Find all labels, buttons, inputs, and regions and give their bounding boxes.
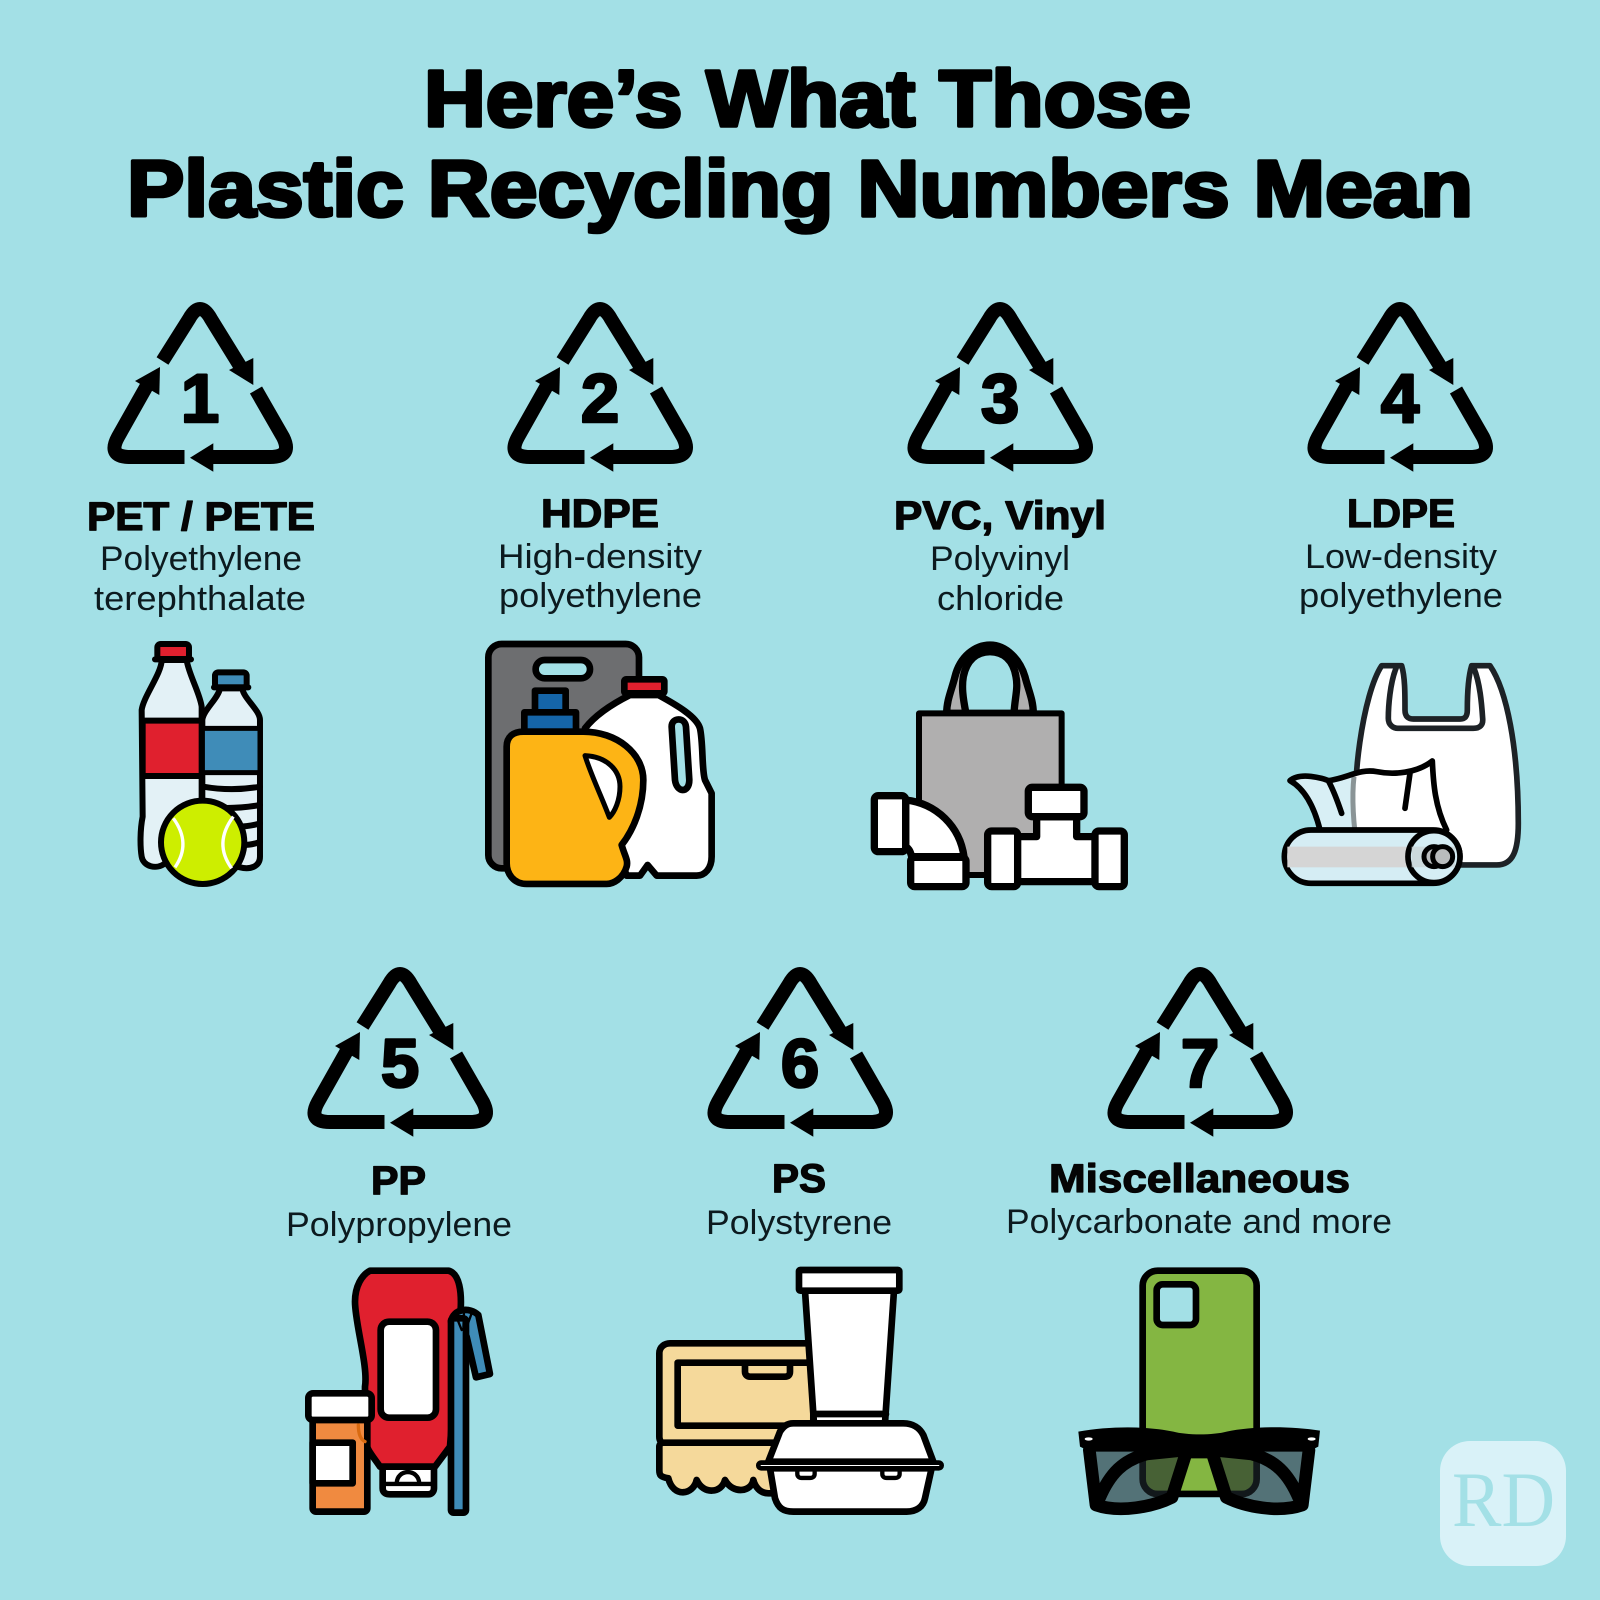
recycling triangle 7 (1114, 974, 1286, 1137)
panel: 2 HDPE (488, 309, 712, 884)
recycling triangle 5 (314, 974, 486, 1137)
label: PVC, Vinyl (894, 494, 1106, 618)
title: Plastic Recycling Numbers Mean (127, 144, 1473, 233)
icon: plastic bag and film roll (1284, 666, 1518, 883)
icon: bottles and tennis ball (141, 644, 260, 884)
icon: phone case and sunglasses (1078, 1271, 1320, 1509)
label: Miscellaneous (1006, 1157, 1392, 1241)
label: PVC, Vinyl: PVC, Vinyl (894, 494, 1106, 538)
logo: RD watermark (1440, 1441, 1566, 1566)
label: LDPE: Low-density (1305, 538, 1497, 576)
label: PS: PS (772, 1157, 826, 1201)
recycling triangle 4: 4 (1381, 360, 1419, 437)
recycling triangle 4 (1314, 309, 1486, 472)
label: HDPE (498, 492, 702, 615)
panel: 5 PP (286, 974, 512, 1513)
label: PS: Polystyrene (706, 1204, 892, 1242)
label: PET / PETE: Polyethylene (100, 540, 302, 578)
recycling triangle 1: 1 (181, 360, 219, 437)
title (127, 54, 1473, 233)
recycling triangle 6: 6 (781, 1025, 819, 1102)
panel: 6 PS (659, 974, 942, 1512)
label: PVC, Vinyl: chloride (937, 580, 1064, 618)
panel: 4 LDPE (1284, 309, 1518, 883)
recycling triangle 2: 2 (581, 360, 619, 437)
recycling triangle 2 (514, 309, 686, 472)
label: LDPE: LDPE (1347, 492, 1455, 536)
icon: tote bag and PVC pipes (874, 645, 1124, 887)
logo: RD watermark: RD (1452, 1456, 1555, 1543)
recycling triangle 7: 7 (1181, 1025, 1219, 1102)
label: LDPE: polyethylene (1299, 577, 1503, 615)
label: HDPE: HDPE (541, 492, 659, 536)
label: Miscellaneous: Miscellaneous (1049, 1157, 1350, 1201)
recycling triangle 3 (914, 309, 1086, 472)
icon: cutting board, detergent and milk jug (488, 644, 712, 884)
label: HDPE: High-density (498, 538, 702, 576)
panel: 3 PVC, Vinyl (874, 309, 1124, 887)
label: PS (706, 1157, 892, 1242)
label: LDPE (1299, 492, 1503, 615)
label: PP (286, 1159, 512, 1244)
label: PET / PETE (87, 495, 315, 618)
panel: 1 PET / PETE (87, 309, 315, 884)
recycling triangle 1 (114, 309, 286, 472)
label: PET / PETE: terephthalate (94, 580, 306, 618)
title: Here’s What Those (424, 54, 1191, 143)
recycling triangle 6 (714, 974, 886, 1137)
label: PET / PETE: PET / PETE (87, 495, 315, 539)
recycling triangle 5: 5 (381, 1025, 419, 1102)
recycling triangle 3: 3 (981, 360, 1019, 437)
label: PVC, Vinyl: Polyvinyl (930, 540, 1070, 578)
label: HDPE: polyethylene (499, 577, 702, 615)
label: PP: PP (371, 1159, 426, 1203)
panel: 7 Miscellaneous (1006, 974, 1392, 1509)
label: Miscellaneous: Polycarbonate and more (1006, 1203, 1392, 1241)
icon: ketchup bottle, pill bottle and straw (308, 1271, 490, 1513)
icon: egg carton, foam cup and clamshell (659, 1270, 942, 1512)
label: PP: Polypropylene (286, 1206, 512, 1244)
